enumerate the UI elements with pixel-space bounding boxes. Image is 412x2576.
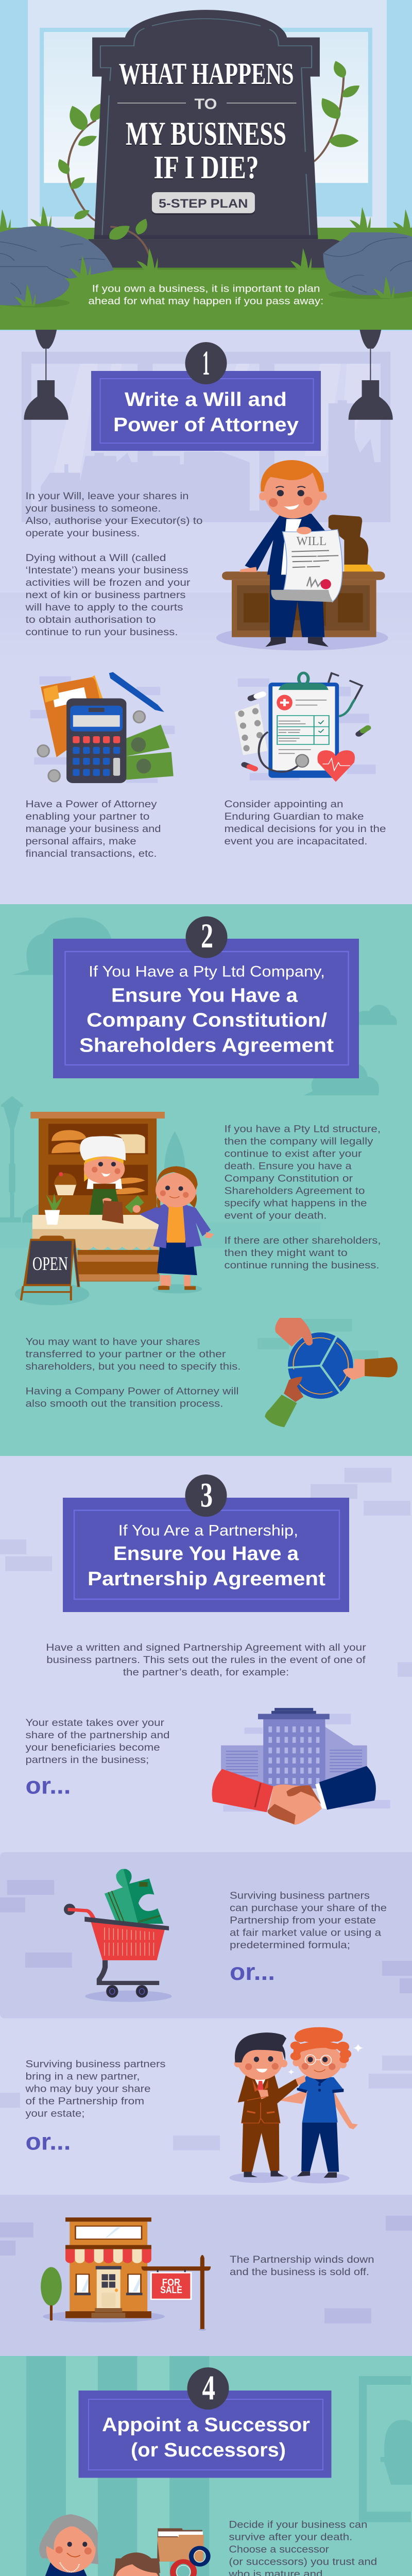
option 3 text: of the Partnership from	[26, 2096, 144, 2107]
power of attorney text: Have a Power of Attorney	[26, 799, 157, 810]
heading text: (or Successors)	[131, 2439, 286, 2461]
heading text	[102, 2414, 310, 2461]
heading text: If You Have a Pty Ltd Company,	[89, 963, 325, 980]
baker	[80, 1136, 126, 1215]
section background: hero sky	[0, 0, 412, 331]
number badge	[185, 342, 227, 384]
section background: step 1	[0, 331, 412, 904]
power of attorney text: enabling your partner to	[26, 811, 149, 822]
step 3 heading panel	[63, 1475, 349, 1612]
illustration: mentor and successor at desk	[27, 2514, 208, 2576]
heading box	[78, 2391, 332, 2478]
option 3 text: Surviving business partners	[26, 2059, 166, 2070]
heading box	[91, 371, 321, 451]
folder and gears	[157, 2528, 208, 2576]
option 3 text	[25, 2059, 166, 2155]
number: 2	[201, 916, 213, 955]
power of attorney text: manage your business and	[26, 824, 161, 835]
enduring guardian text	[225, 799, 386, 847]
for sale label: FOR	[162, 2278, 180, 2289]
right lamp	[349, 330, 393, 420]
right rock	[323, 232, 412, 295]
step 1 text	[25, 491, 203, 638]
mentor	[39, 2514, 101, 2576]
successor text	[228, 2519, 377, 2576]
option 2 text	[230, 1891, 387, 1985]
number badge	[185, 916, 228, 958]
heading text: Partnership Agreement	[88, 1568, 325, 1590]
step 1 text: activities will be frozen and your	[26, 578, 191, 588]
left lamp	[24, 330, 68, 420]
heading inner border	[100, 379, 313, 443]
intro text: If you own a business, it is important to plan	[92, 283, 320, 295]
successor text: Decide if your business can	[229, 2519, 367, 2531]
option 3 text: your estate;	[26, 2109, 84, 2120]
window frame	[22, 352, 390, 522]
step 2 street backdrop	[0, 918, 397, 1248]
framed cactus picture	[359, 2376, 412, 2522]
wall stripes	[26, 2356, 209, 2576]
heading text: Appoint a Successor	[102, 2414, 310, 2436]
illustration: shopping cart with money puzzle piece	[64, 1869, 172, 2002]
pty ltd text: then they might want to	[225, 1248, 348, 1259]
grass tufts behind	[0, 206, 412, 231]
successor text: (or successors) you trust and	[229, 2556, 377, 2568]
step 1 text: Dying without a Will (called	[26, 553, 166, 564]
power of attorney text	[26, 799, 161, 859]
floor	[0, 592, 412, 659]
heading text: If You Are a Partnership,	[118, 1522, 298, 1539]
option 4 panel	[0, 2195, 412, 2356]
intro text	[88, 283, 323, 307]
option 4 bricks	[0, 2216, 412, 2324]
enduring guardian text: Consider appointing an	[225, 799, 343, 810]
partnership intro text: the partner’s death, for example:	[123, 1667, 289, 1678]
heading text: Write a Will and	[125, 389, 287, 411]
title: TO	[195, 96, 217, 112]
illustration: medical clipboard	[235, 673, 376, 782]
number badge	[187, 2367, 229, 2410]
option 1 text: or...	[26, 1772, 71, 1799]
shares transfer text	[26, 1337, 241, 1410]
gravestone base	[88, 239, 344, 268]
illustration: two business partners	[229, 2027, 364, 2183]
heading box	[53, 939, 359, 1078]
pty ltd text: specify what happens in the	[225, 1198, 367, 1209]
option 4 text: and the business is sold off.	[230, 2267, 369, 2278]
step 1 text: continue to run your business.	[26, 627, 178, 638]
number: 4	[202, 2368, 215, 2408]
grass tufts in front	[14, 248, 394, 306]
lighter wall stripes	[66, 2356, 169, 2576]
window	[40, 28, 372, 216]
light streaks	[53, 364, 373, 481]
number badge	[185, 1475, 227, 1517]
step 1 text: Also, authorise your Executor(s) to	[26, 516, 203, 527]
option 1 text: partners in the business;	[26, 1755, 149, 1766]
gravestone inset lines	[100, 19, 312, 239]
step 1 heading panel: 1	[202, 343, 210, 382]
plan badge	[152, 192, 255, 215]
option 2 text: Surviving business partners	[230, 1891, 370, 1902]
section background: step 2	[0, 904, 412, 1456]
for sale label: SALE	[160, 2285, 182, 2296]
option 1 text	[26, 1718, 170, 1799]
shares transfer text: shareholders, but you need to specify this.	[26, 1362, 241, 1372]
intro text: ahead for what may happen if you pass away:	[88, 296, 323, 307]
option 1 text: Your estate takes over your	[26, 1718, 165, 1728]
power of attorney text: personal affairs, make	[26, 836, 136, 847]
illustration: bakery shop with customer	[15, 1112, 214, 1305]
customer	[133, 1166, 214, 1290]
heading text	[79, 963, 334, 1057]
for sale label	[160, 2278, 182, 2296]
illustration: shop for sale	[41, 2217, 211, 2331]
shares transfer text: You may want to have your shares	[26, 1337, 200, 1348]
option 1 text: your beneficiaries become	[26, 1742, 160, 1753]
title: MY BUSINESS	[126, 115, 286, 152]
open sign label: OPEN	[32, 1253, 68, 1275]
option 4 text: The Partnership winds down	[230, 2255, 374, 2265]
pty ltd text	[225, 1124, 381, 1271]
step 4 heading panel	[78, 2367, 332, 2478]
step 3 background bricks	[0, 1468, 412, 1677]
option 2 text: predetermined formula;	[230, 1940, 350, 1951]
pty ltd text: Company Constitution or	[225, 1174, 353, 1184]
successor	[102, 2552, 171, 2576]
enduring guardian text: Enduring Guardian to make	[225, 811, 364, 822]
shares transfer text: also smooth out the transition process.	[26, 1398, 224, 1410]
shares transfer text: Having a Company Power of Attorney will	[26, 1386, 239, 1397]
illustration: three hands holding pie	[258, 1318, 398, 1427]
option 1 text: share of the partnership and	[26, 1730, 170, 1741]
pty ltd text: then the company will legally	[225, 1137, 373, 1147]
illustration: handshake and office towers	[212, 1708, 390, 1825]
heading text: Company Constitution/	[87, 1010, 327, 1031]
heading text: Ensure You Have a	[113, 1543, 299, 1565]
section background: step 4	[0, 2356, 412, 2576]
shares transfer text: transferred to your partner or the other	[26, 1349, 226, 1360]
option 2 bricks	[0, 1880, 412, 1993]
heading text: Shareholders Agreement	[79, 1035, 334, 1057]
gravestone	[92, 10, 320, 239]
option 2 panel	[0, 1852, 412, 2019]
pty ltd text: Shareholders Agreement to	[225, 1186, 365, 1196]
step 1 heading panel	[91, 342, 321, 451]
step 1 text: your business to someone.	[26, 503, 161, 514]
option 3 text: who may buy your share	[25, 2084, 151, 2095]
pty ltd text: death. Ensure you have a	[225, 1161, 352, 1172]
step 1 text: will have to apply to the courts	[25, 602, 183, 613]
window panes	[31, 364, 381, 511]
power of attorney text: financial transactions, etc.	[26, 849, 157, 859]
heading inner border	[65, 952, 348, 1065]
stone shadow band	[94, 235, 318, 239]
partnership intro text	[46, 1642, 366, 1678]
will label: WILL	[297, 535, 327, 548]
city skyline	[41, 400, 381, 511]
step 1 text: to obtain authorisation to	[26, 615, 156, 625]
pty ltd text: If there are other shareholders,	[225, 1235, 381, 1246]
step 1 text: next of kin or business partners	[26, 590, 185, 601]
option 3 text: bring in a new partner,	[26, 2072, 140, 2082]
heading line 2: Power of Attorney	[113, 414, 299, 436]
grass ground	[0, 228, 412, 330]
step 1 text: operate your business.	[26, 528, 140, 539]
pty ltd text: If you have a Pty Ltd structure,	[225, 1124, 381, 1134]
option 2 text: can purchase your share of the	[230, 1903, 387, 1914]
illustration: man holding a will at desk	[216, 460, 388, 650]
left vine behind stone	[55, 100, 110, 227]
heading box	[63, 1498, 349, 1612]
ground shadow	[110, 268, 326, 270]
pty ltd text: continue running the business.	[225, 1260, 379, 1271]
section background: step 3	[0, 1456, 412, 2356]
pty ltd text: event of your death.	[225, 1211, 327, 1221]
left vine in front	[105, 217, 151, 263]
right vine	[314, 59, 363, 161]
partnership intro text: business partners. This sets out the rules in the event of one of	[46, 1655, 366, 1666]
pty ltd text: continue to exist after your	[225, 1149, 362, 1159]
heading text	[88, 1522, 325, 1590]
heading inner border	[89, 2399, 323, 2470]
title: IF I DIE?	[153, 149, 259, 185]
heading inner border	[74, 1511, 339, 1599]
step 4 office backdrop	[0, 2356, 412, 2576]
step 2 heading panel	[53, 916, 359, 1078]
option 4 text	[230, 2255, 374, 2278]
option 2 text: Partnership from your estate	[230, 1916, 376, 1926]
hero illustration: gravestone scene	[0, 0, 412, 330]
step 1 text: In your Will, leave your shares in	[26, 491, 188, 502]
option 2 text: at fair market value or using a	[230, 1928, 381, 1939]
illustration: calculator, folder and cash	[30, 672, 175, 783]
option 3 text: or...	[26, 2128, 71, 2155]
enduring guardian text: event you are incapacitated.	[225, 836, 368, 847]
title	[117, 57, 297, 185]
option 3 bricks	[0, 2056, 412, 2150]
step 1 text: ‘Intestate’) means your business	[26, 565, 188, 576]
open sign	[21, 1235, 80, 1300]
wall	[28, 0, 387, 228]
badge label: 5-STEP PLAN	[159, 197, 248, 211]
partnership intro text: Have a written and signed Partnership Agreement with all your	[46, 1642, 366, 1653]
successor text: Choose a successor	[229, 2544, 330, 2555]
step 1 office backdrop	[0, 330, 412, 659]
left rocks	[0, 226, 114, 306]
rock shadows	[0, 290, 412, 308]
number: 3	[200, 1476, 213, 1515]
enduring guardian text: medical decisions for you in the	[225, 824, 386, 835]
option 2 text: or...	[230, 1958, 275, 1985]
successor text: survive after your death.	[229, 2532, 352, 2543]
heading text: Ensure You Have a	[111, 985, 298, 1007]
title: WHAT HAPPENS	[119, 57, 294, 91]
